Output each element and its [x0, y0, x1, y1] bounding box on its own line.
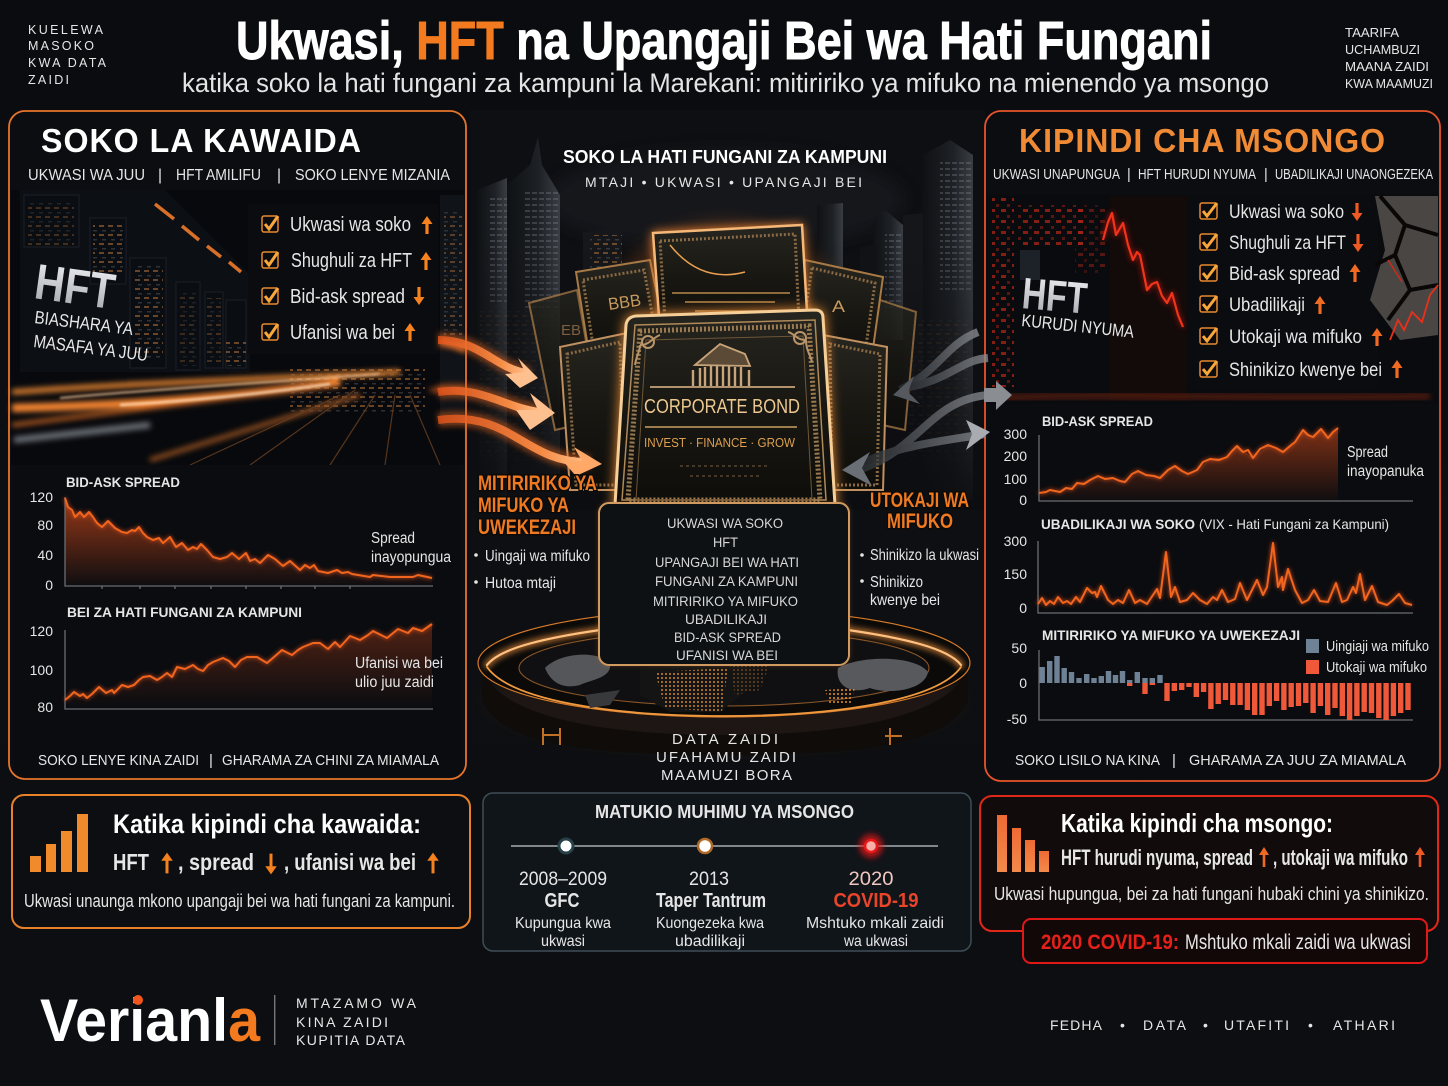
label: fund inflows	[474, 472, 597, 592]
chart: bid-ask spread (stress): BID-ASK SPREAD	[1042, 413, 1153, 429]
metrics box: UFANISI WA BEI	[676, 647, 778, 663]
panel: stress period	[985, 111, 1440, 781]
bond card top	[653, 225, 808, 330]
chart: bond prices (normal)	[30, 604, 443, 715]
legend: Utokaji wa mifuko	[1326, 659, 1427, 676]
chart: bid-ask spread (stress): inayopanuka	[1347, 463, 1424, 480]
top right note: UCHAMBUZI	[1345, 43, 1420, 57]
center heading	[563, 147, 887, 190]
panel tagline	[993, 167, 1433, 183]
checklist	[1200, 201, 1402, 381]
chart: bid-ask spread (stress): 200	[1004, 448, 1027, 464]
central illustration	[470, 110, 985, 784]
chart: volatility: 300	[1004, 533, 1027, 549]
event 2020: 2020	[848, 869, 894, 890]
platform	[478, 609, 970, 755]
chart: bid-ask spread (normal): 40	[37, 547, 53, 563]
chart: fund flows: 50	[1011, 640, 1027, 656]
main bond card	[615, 310, 835, 505]
chart: fund flows: MITIRIRIKO YA MIFUKO YA UWEKEZAJI	[1042, 627, 1300, 643]
label: fund outflows	[860, 489, 979, 609]
center closing text: UFAHAMU ZAIDI	[656, 749, 796, 766]
panel footer	[38, 752, 439, 769]
platform light posts	[543, 728, 902, 745]
checklist: Shughuli za HFT	[1229, 232, 1346, 254]
panel: normal market	[9, 111, 466, 779]
checklist	[262, 214, 432, 344]
footer tags: •	[1308, 1017, 1313, 1033]
panel tagline: |	[158, 167, 162, 184]
event 2008-2009	[515, 869, 611, 950]
HFT label	[1020, 269, 1135, 342]
checklist: Utokaji wa mifuko	[1229, 326, 1362, 348]
chart: bid-ask spread (normal): Spread	[371, 530, 415, 547]
center closing text: DATA ZAIDI	[672, 731, 778, 748]
inflow bars	[1040, 656, 1163, 683]
chart: volatility: 0	[1019, 600, 1027, 616]
footer tags: •	[1203, 1017, 1208, 1033]
panel tagline	[28, 167, 451, 184]
covid callout: 2020 COVID-19:	[1041, 931, 1179, 954]
chart: volatility	[1004, 516, 1413, 616]
label: fund inflows: Uingaji wa mifuko	[485, 548, 590, 565]
back bond cards	[529, 225, 916, 490]
event 2013: 2013	[689, 869, 729, 890]
panel title: SOKO LA KAWAIDA	[41, 122, 362, 159]
panel border	[985, 111, 1440, 781]
card ratings: BBB	[607, 291, 642, 314]
checklist: Ukwasi wa soko	[1229, 201, 1344, 223]
logo tagline: MTAZAMO WA	[296, 995, 417, 1011]
HFT label: HFT	[31, 253, 118, 320]
summary: normal period: , spread	[178, 849, 254, 875]
footer tags: UTAFITI	[1224, 1017, 1289, 1033]
metrics box	[599, 503, 849, 665]
logo tagline	[296, 995, 417, 1048]
panel footer: GHARAMA ZA CHINI ZA MIAMALA	[222, 752, 439, 769]
cracked rock	[1370, 196, 1438, 340]
event 2008-2009: 2008–2009	[519, 869, 607, 890]
covid callout	[1023, 919, 1427, 963]
timeline: key stress events: MATUKIO MUHIMU YA MSONGO	[595, 802, 854, 822]
footer tags: DATA	[1143, 1017, 1187, 1033]
panel tagline: HFT HURUDI NYUMA	[1138, 167, 1256, 183]
chart: fund flows: 0	[1019, 675, 1027, 691]
chart: bid-ask spread (stress): Spread	[1347, 444, 1388, 461]
event 2013: ubadilikaji	[675, 933, 745, 950]
skyline	[470, 110, 985, 510]
top left note: KWA DATA	[28, 56, 107, 70]
panel footer: SOKO LISILO NA KINA	[1015, 752, 1160, 769]
chart: bid-ask spread (normal): 0	[45, 577, 53, 593]
icon: rising bars	[30, 814, 88, 872]
chart: bond prices (normal): 80	[37, 699, 53, 715]
logo	[40, 987, 417, 1054]
top left note	[28, 23, 107, 87]
checklist: Ubadilikaji	[1229, 294, 1305, 316]
event 2020	[806, 869, 944, 950]
metrics box: UKWASI WA SOKO	[667, 515, 783, 531]
label: fund outflows: MIFUKO	[887, 510, 953, 533]
light streaks	[12, 340, 465, 460]
bond motto: INVEST · FINANCE · GROW	[644, 436, 795, 450]
HFT label: BIASHARA YA	[34, 307, 134, 339]
top left note: ZAIDI	[28, 73, 69, 87]
label: fund inflows: UWEKEZAJI	[478, 516, 576, 539]
subtitle: katika soko la hati fungani za kampuni la Marekani: mitiririko ya mifuko na mienendo ya msongo	[182, 68, 1269, 98]
chart backing	[988, 406, 1437, 778]
chart: bid-ask spread (normal): 120	[30, 489, 53, 505]
metrics box: UPANGAJI BEI WA HATI	[655, 554, 799, 570]
corner ornaments	[635, 332, 812, 365]
panel tagline: |	[277, 167, 281, 184]
chart: fund flows: -50	[1007, 711, 1027, 727]
label: fund outflows: Shinikizo	[870, 574, 923, 591]
chart: bid-ask spread (normal): inayopungua	[371, 549, 451, 566]
label: fund inflows: MITIRIRIKO YA	[478, 472, 597, 495]
glow behind bonds	[585, 220, 865, 520]
summary: stress period: HFT hurudi nyuma, spread	[1061, 845, 1253, 870]
chart: bond prices (normal): ulio juu zaidi	[355, 674, 434, 691]
panel tagline: SOKO LENYE MIZANIA	[295, 167, 451, 184]
HFT label: MASAFA YA JUU	[33, 331, 149, 365]
panel footer: GHARAMA ZA JUU ZA MIAMALA	[1189, 752, 1406, 769]
footer tags: FEDHA	[1050, 1017, 1103, 1033]
summary: normal period: HFT	[113, 849, 149, 875]
panel footer: |	[209, 752, 213, 769]
top right note	[1345, 26, 1433, 91]
panel tagline: UKWASI UNAPUNGUA	[993, 167, 1120, 183]
panel title: KIPINDI CHA MSONGO	[1019, 122, 1386, 159]
panel tagline: HFT AMILIFU	[176, 167, 261, 184]
summary: stress period: Katika kipindi cha msongo:	[1061, 808, 1333, 838]
footer tags	[1050, 1017, 1395, 1033]
panel footer: |	[1172, 752, 1176, 769]
top left note: KUELEWA	[28, 23, 104, 37]
timeline: key stress events	[483, 793, 971, 951]
summary: normal period: , ufanisi wa bei	[284, 849, 416, 875]
label: fund outflows: Shinikizo la ukwasi	[870, 547, 979, 564]
chart: fund flows	[1007, 627, 1429, 727]
label: fund inflows: Hutoa mtaji	[485, 575, 556, 592]
event 2013: Taper Tantrum	[656, 890, 766, 912]
chart: bid-ask spread (stress): 0	[1019, 492, 1027, 508]
red falling chart	[1103, 213, 1183, 327]
checklist: Bid-ask spread	[1229, 263, 1340, 285]
event 2013: Kuongezeka kwa	[656, 915, 764, 932]
chart: volatility: UBADILIKAJI WA SOKO	[1041, 516, 1195, 532]
panel tagline: |	[1264, 167, 1268, 183]
icon: falling bars	[997, 815, 1049, 872]
chart: bid-ask spread (normal): BID-ASK SPREAD	[66, 474, 180, 490]
chart: bid-ask spread (normal): 80	[37, 517, 53, 533]
label: fund inflows: MIFUKO YA	[478, 494, 569, 517]
chart: bid-ask spread (stress): 100	[1004, 471, 1027, 487]
card ratings: EB	[561, 322, 581, 339]
metrics box: HFT	[713, 534, 738, 550]
panel footer: SOKO LENYE KINA ZAIDI	[38, 752, 199, 769]
chart: bond prices (normal): BEI ZA HATI FUNGANI ZA KAMPUNI	[67, 604, 302, 620]
center closing text: MAAMUZI BORA	[661, 767, 792, 784]
HFT label: HFT	[1020, 269, 1089, 324]
card ratings: A	[832, 297, 846, 316]
summary: normal period: Ukwasi unaunga mkono upangaji bei wa hati fungani za kampuni.	[24, 891, 455, 911]
top left note: MASOKO	[28, 39, 94, 53]
event 2020: Mshtuko mkali zaidi	[806, 915, 944, 932]
checklist: Bid-ask spread	[290, 286, 405, 308]
event 2008-2009: Kupungua kwa	[515, 915, 611, 932]
legend: Uingiaji wa mifuko	[1326, 638, 1429, 655]
logo: Verianla	[40, 987, 261, 1054]
event 2020: COVID-19	[834, 890, 918, 912]
arrows: inflows	[438, 340, 602, 476]
icon: bank building	[650, 344, 795, 387]
chart: bid-ask spread (normal)	[30, 474, 451, 593]
checklist: Shughuli za HFT	[291, 250, 412, 272]
event 2008-2009: ukwasi	[541, 933, 585, 950]
bright ring arcs	[487, 630, 961, 716]
event 2020: wa ukwasi	[843, 933, 908, 950]
chart: bid-ask spread (stress): 300	[1004, 426, 1027, 442]
panel image: HFT retreat	[987, 195, 1438, 405]
footer tags: ATHARI	[1333, 1017, 1395, 1033]
bond title: CORPORATE BOND	[644, 396, 800, 418]
center heading: SOKO LA HATI FUNGANI ZA KAMPUNI	[563, 147, 887, 167]
center closing text	[656, 731, 796, 784]
chart: volatility: 150	[1004, 566, 1027, 582]
panel image: HFT server hall	[11, 190, 465, 465]
legend	[1306, 638, 1429, 676]
top right note: MAANA ZAIDI	[1345, 60, 1429, 74]
center heading: MTAJI • UKWASI • UPANGAJI BEI	[585, 174, 862, 190]
panel footer	[1015, 752, 1406, 769]
summary: stress period	[980, 796, 1438, 931]
HFT label: KURUDI NYUMA	[1021, 310, 1135, 342]
header	[28, 11, 1433, 98]
logo tagline: KINA ZAIDI	[296, 1014, 388, 1030]
metrics box: BID-ASK SPREAD	[674, 629, 781, 645]
event 2008-2009: GFC	[544, 890, 580, 912]
top right note: TAARIFA	[1345, 26, 1400, 40]
outflow bars	[1127, 683, 1411, 720]
chart: volatility: (VIX - Hati Fungani za Kampuni)	[1199, 516, 1389, 532]
event 2013	[656, 869, 766, 950]
metrics box: FUNGANI ZA KAMPUNI	[655, 573, 798, 589]
summary: normal period	[12, 795, 470, 928]
chart: bond prices (normal): Ufanisi wa bei	[355, 655, 443, 672]
footer tags: •	[1120, 1017, 1125, 1033]
chart: bid-ask spread (stress)	[1004, 413, 1424, 508]
HFT label	[31, 253, 149, 365]
card ratings	[561, 291, 846, 339]
panel border	[9, 111, 466, 779]
metrics box: MITIRIRIKO YA MIFUKO	[653, 593, 798, 609]
top right note: KWA MAAMUZI	[1345, 77, 1433, 91]
metrics box: UBADILIKAJI	[685, 611, 767, 627]
chart backing	[14, 465, 462, 775]
label: fund outflows: kwenye bei	[870, 592, 940, 609]
world map	[545, 655, 928, 712]
checklist: Ukwasi wa soko	[290, 214, 411, 236]
arrows: outflows	[842, 332, 1012, 486]
panel tagline: UKWASI WA JUU	[28, 167, 145, 184]
title: Ukwasi, HFT na Upangaji Bei wa Hati Fungani	[236, 11, 1212, 71]
chart: bond prices (normal): 100	[30, 662, 53, 678]
logo tagline: KUPITIA DATA	[296, 1032, 406, 1048]
checklist: Shinikizo kwenye bei	[1229, 359, 1382, 381]
chart: bond prices (normal): 120	[30, 623, 53, 639]
summary: normal period: Katika kipindi cha kawaida:	[113, 809, 421, 839]
label: fund outflows: UTOKAJI WA	[870, 489, 969, 512]
checklist: Ufanisi wa bei	[290, 322, 395, 344]
panel tagline: |	[1127, 167, 1131, 183]
